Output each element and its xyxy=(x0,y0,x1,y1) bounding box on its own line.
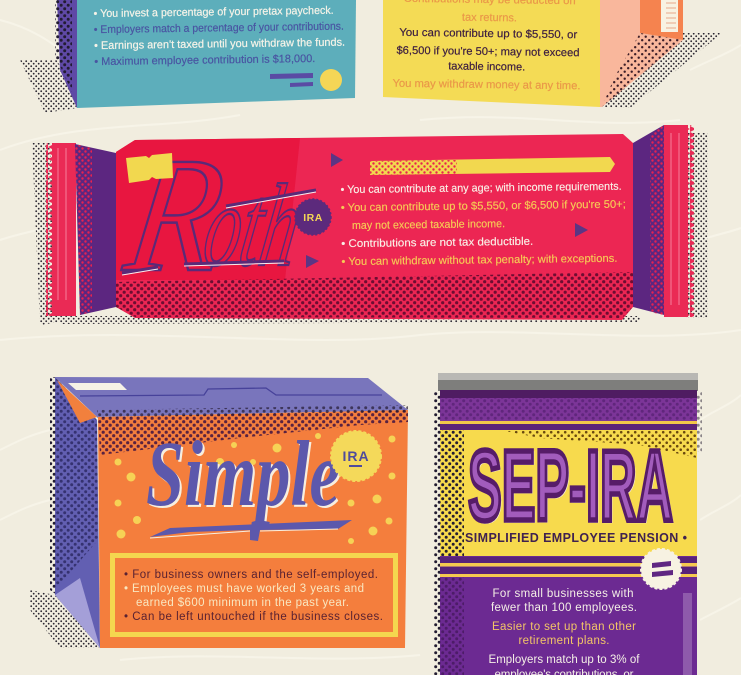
badge: IRA: IRA xyxy=(342,448,370,464)
shadow halftone xyxy=(601,33,722,108)
text: SEP-IRA features: For small businesses with xyxy=(492,588,634,600)
wrapper right xyxy=(633,125,694,317)
panel: yellow traditional IRA box xyxy=(383,0,722,108)
front face xyxy=(77,0,356,108)
list: Roth features: • You can withdraw without tax penalty; with exceptions. xyxy=(341,253,618,268)
panel: SEP-IRA pouch xyxy=(434,373,702,675)
framed list: Simple features: • For business owners and the self-employed. xyxy=(124,569,378,581)
box side xyxy=(55,377,100,648)
title: Simple script: Simple xyxy=(148,424,342,528)
top purple band xyxy=(440,390,697,430)
list: 401k features xyxy=(94,5,345,68)
text: traditional IRA features xyxy=(392,0,582,92)
text: SEP-IRA features: fewer than 100 employees. xyxy=(491,602,637,614)
lower purple section xyxy=(440,556,697,675)
bar body xyxy=(116,134,633,320)
text: SEP-IRA features: Employers match up to 3% of xyxy=(488,654,640,666)
yellow progress bar xyxy=(370,157,615,175)
text: SEP-IRA features: Easier to set up than other xyxy=(492,621,636,633)
text: SEP-IRA features: retirement plans. xyxy=(518,635,610,647)
framed list: Simple features: earned $600 minimum in the past year. xyxy=(136,597,349,609)
icon: equals bars and dot xyxy=(270,69,342,91)
list: 401k features: • You invest a percentage of your pretax paycheck. xyxy=(94,5,334,20)
subtitle: SIMPLIFIED EMPLOYEE PENSION • xyxy=(465,531,687,545)
icon: barcode label xyxy=(661,0,678,32)
badge: IRA xyxy=(295,199,331,235)
title: Roth script: oth xyxy=(195,160,311,291)
list: Roth features: may not exceed taxable income. xyxy=(352,218,505,232)
list: Roth features: • You can contribute at any age; with income requirements. xyxy=(340,181,622,196)
decorative yellow dots xyxy=(114,433,396,544)
text: traditional IRA features: You can contribute up to $5,550, or xyxy=(399,27,578,41)
badge: IRA: IRA xyxy=(303,212,323,224)
shadow halftone xyxy=(434,392,440,675)
text: traditional IRA features: tax returns. xyxy=(462,12,517,24)
panel: Simple IRA box xyxy=(30,377,408,648)
box front xyxy=(98,410,408,648)
title: Roth script xyxy=(116,124,316,306)
side panel xyxy=(600,0,683,107)
framed list: Simple features: • Employees must have worked 3 years and xyxy=(124,583,364,595)
text: SEP-IRA features xyxy=(488,588,640,675)
yellow tape label xyxy=(126,153,173,183)
shadow halftone xyxy=(32,143,60,325)
side panel xyxy=(57,0,77,108)
panel: blue traditional 401k box xyxy=(20,0,356,113)
list: Roth features xyxy=(340,181,627,268)
title: Roth script: R xyxy=(116,124,234,306)
front face xyxy=(383,0,600,107)
arrows: triangles xyxy=(306,153,588,268)
yellow label xyxy=(440,430,697,558)
text: traditional IRA features: $6,500 if you're 50+; may not exceed xyxy=(396,45,580,59)
badge: equals sign xyxy=(641,549,681,589)
title: Simple script: Simple xyxy=(146,422,340,526)
list: Roth features: • Contributions are not tax deductible. xyxy=(341,236,533,250)
framed list: Simple features: • Can be left untouched if the business closes. xyxy=(124,611,383,623)
text: traditional IRA features: taxable income. xyxy=(448,60,525,73)
framed list: Simple features xyxy=(112,556,396,634)
pouch seal xyxy=(438,373,698,391)
box lid xyxy=(55,377,408,423)
text: traditional IRA features: You may withdraw money at any time. xyxy=(392,78,581,92)
shadow halftone xyxy=(30,590,100,648)
wrapper left xyxy=(46,143,116,316)
list: 401k features: • Earnings aren't taxed until you withdraw the funds. xyxy=(94,37,345,52)
list: Roth features: • You can contribute up to $5,550, or $6,500 if you're 50+; xyxy=(341,199,626,214)
shadow halftone xyxy=(20,60,77,113)
list: 401k features: • Maximum employee contribution is $18,000. xyxy=(94,53,315,68)
badge: IRA xyxy=(331,431,381,481)
panel: Roth IRA candy bar xyxy=(32,124,708,325)
list: 401k features: • Employers match a percentage of your contributions. xyxy=(94,21,344,36)
